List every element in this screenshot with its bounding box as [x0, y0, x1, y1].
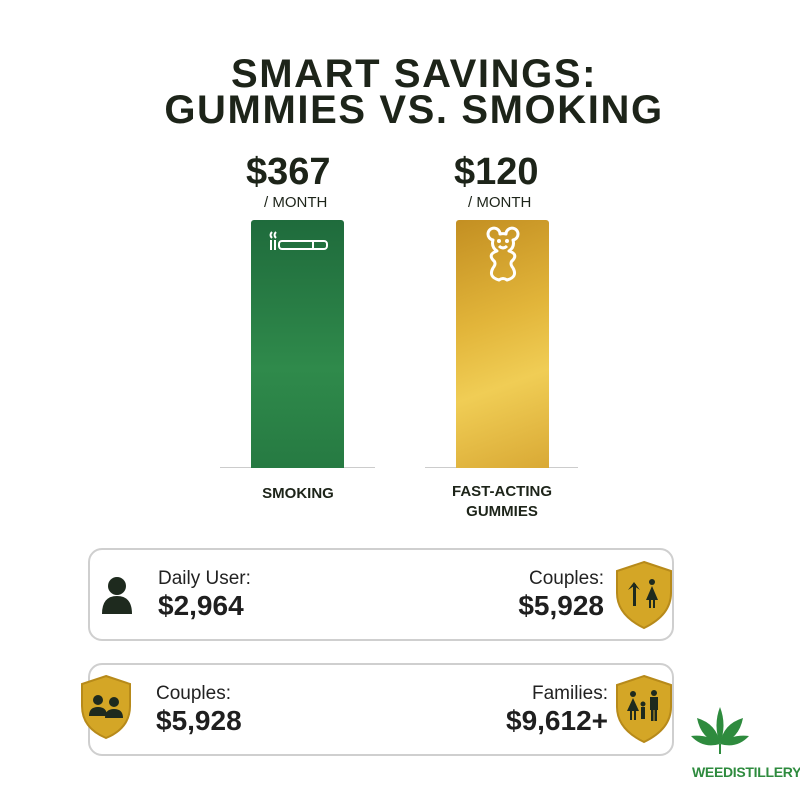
icon: shield couples 2: [81, 675, 131, 740]
text: families: $9,612+: [506, 705, 608, 736]
icon: shield couples: [616, 561, 672, 630]
text: daily user: Daily User:: [158, 568, 251, 589]
bar: smoking: [251, 220, 344, 468]
baseline: [220, 467, 375, 468]
icon: person: [102, 577, 132, 614]
text: couples: $5,928: [518, 590, 604, 621]
panel: row 1: [88, 548, 674, 641]
label: gummies: [452, 483, 552, 520]
text: couples 2: Couples:: [156, 683, 231, 704]
title: GUMMIES VS. SMOKING: [164, 88, 664, 132]
icon: leaf: [691, 707, 749, 754]
price: smoking: / MONTH: [264, 194, 327, 211]
price: gummies: / MONTH: [468, 194, 531, 211]
label: smoking: SMOKING: [262, 485, 334, 502]
text: couples 2: [156, 683, 242, 736]
label: gummies: FAST-ACTING: [452, 483, 552, 500]
logo: [691, 707, 800, 780]
text: couples 2: $5,928: [156, 705, 242, 736]
logo: WEEDISTILLERY: [692, 764, 800, 780]
price: gummies: $120: [454, 151, 539, 193]
icon: cigarette: [270, 231, 328, 250]
panel: row 2: [88, 663, 674, 756]
title: [164, 52, 664, 132]
price: smoking: $367: [246, 151, 331, 193]
bar: gummies: [456, 220, 549, 468]
icon: gummy bear: [486, 226, 520, 282]
text: couples: Couples:: [529, 568, 604, 589]
icon: shield families: [616, 675, 672, 744]
text: families: [506, 683, 608, 736]
title: SMART SAVINGS:: [231, 52, 597, 96]
text: daily user: [158, 568, 251, 621]
text: couples: [518, 568, 604, 621]
text: families: Families:: [532, 683, 608, 704]
label: gummies: GUMMIES: [466, 503, 538, 520]
text: daily user: $2,964: [158, 590, 244, 621]
